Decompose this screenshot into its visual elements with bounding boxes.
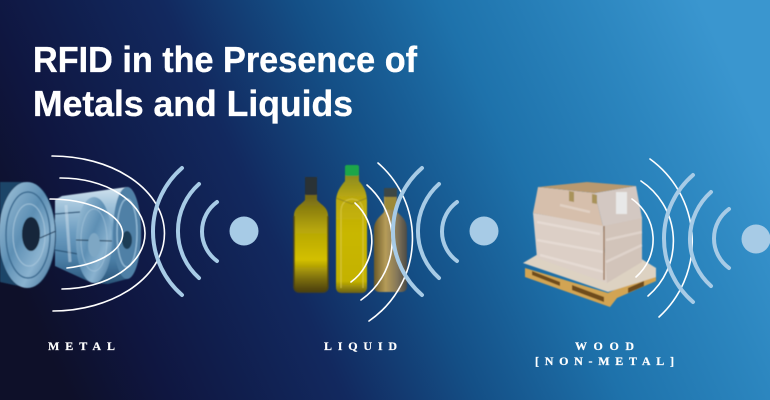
label: liquid: LIQUID bbox=[324, 339, 397, 353]
signal: blue emitted arcs bbox=[153, 168, 217, 295]
RFID reader dot bbox=[470, 216, 498, 246]
label: metal: METAL bbox=[48, 339, 115, 353]
title: Metals and Liquids bbox=[33, 83, 353, 124]
RFID reader dot bbox=[742, 224, 770, 254]
title: RFID in the Presence of bbox=[33, 39, 418, 80]
label: wood non-metal bbox=[535, 339, 674, 368]
signal: white reflected arcs bbox=[632, 159, 692, 317]
signal: white reflected arcs bbox=[351, 163, 412, 321]
signal: blue emitted arcs bbox=[393, 168, 457, 295]
panel: wood bbox=[523, 159, 770, 317]
image: wrapped wooden pallet bbox=[523, 182, 656, 307]
signal: blue emitted arcs bbox=[664, 175, 729, 302]
image: olive oil bottles bbox=[294, 165, 407, 293]
panel: metal bbox=[0, 156, 258, 311]
signal: white reflected arcs bbox=[50, 156, 164, 311]
label: wood non-metal: [NON-METAL] bbox=[535, 354, 674, 368]
title bbox=[33, 39, 418, 124]
panel: liquid bbox=[294, 163, 498, 321]
label: wood non-metal: WOOD bbox=[575, 339, 634, 353]
RFID reader dot bbox=[230, 216, 258, 246]
image: steel coils bbox=[0, 182, 141, 288]
